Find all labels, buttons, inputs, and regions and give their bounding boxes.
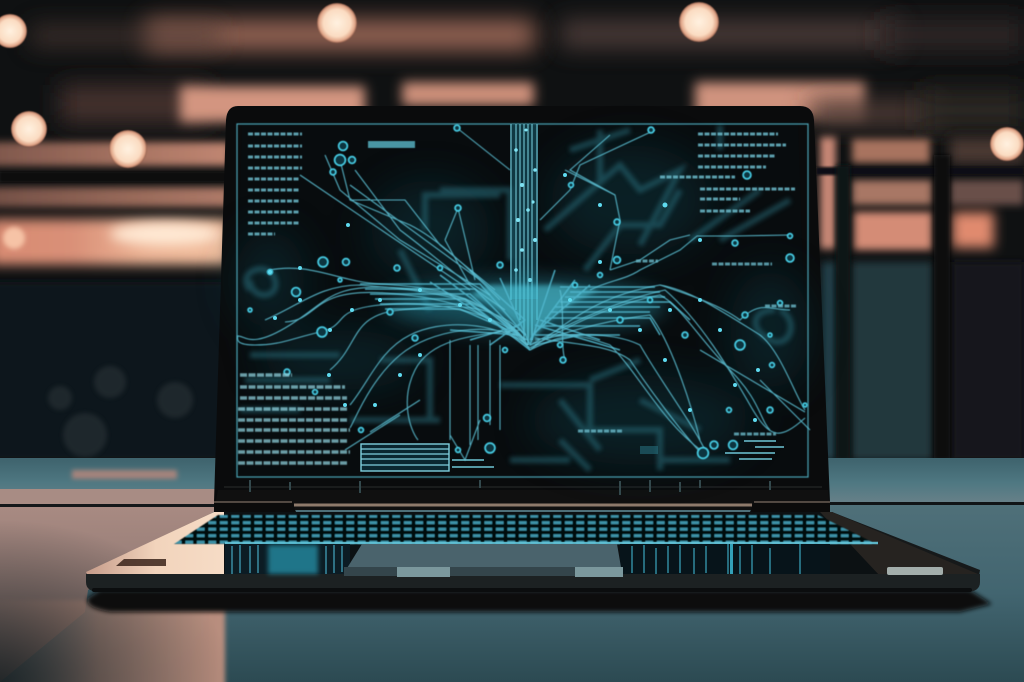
background: blurred room bbox=[0, 0, 1024, 470]
screen text block: bottom left bbox=[238, 375, 350, 463]
faded bokeh lights bbox=[48, 366, 193, 457]
background glowing strip: left bbox=[0, 219, 230, 265]
screen: haze bbox=[235, 145, 810, 465]
network fan glow bbox=[385, 279, 665, 331]
network branches: right bbox=[457, 128, 810, 452]
screen text block: top label bbox=[368, 141, 415, 148]
screen text block: top left bbox=[248, 134, 302, 234]
background band: middle bbox=[60, 85, 210, 123]
central trunk bbox=[510, 124, 538, 345]
trackpad bbox=[344, 544, 622, 573]
laptop shadow bbox=[87, 590, 992, 612]
keyboard bbox=[174, 515, 876, 544]
screen: lower bezel reflections bbox=[250, 480, 770, 495]
screen text block: top right bbox=[660, 134, 795, 211]
background strips: right bbox=[852, 139, 930, 163]
table bbox=[0, 460, 1024, 682]
laptop base bbox=[86, 512, 980, 592]
background band: top bbox=[145, 20, 535, 50]
small bright nodes bbox=[268, 173, 760, 422]
lamps bbox=[0, 2, 1024, 168]
network trunks: horizontal bundles bbox=[360, 270, 690, 350]
screen lines: bottom bbox=[452, 441, 784, 467]
screen chart box bbox=[361, 444, 449, 471]
network nodes bbox=[248, 125, 807, 458]
screen text labels: right bbox=[578, 261, 797, 434]
screen: faint circuit background bbox=[240, 125, 791, 470]
laptop lid bbox=[214, 106, 830, 512]
indicator right bbox=[887, 567, 943, 575]
screen bbox=[233, 122, 810, 495]
background dark panel: lower left bbox=[0, 282, 226, 460]
screen reflection right bbox=[620, 544, 830, 574]
background dark panels: lower right bbox=[852, 262, 932, 460]
railing bbox=[0, 172, 226, 182]
background band: lower left bbox=[0, 142, 230, 166]
network branches: left bbox=[237, 155, 530, 460]
hinge bbox=[214, 502, 830, 512]
indicator left bbox=[116, 559, 166, 566]
table reflection: pink left bbox=[0, 507, 222, 682]
keyboard front edge glow bbox=[225, 542, 878, 544]
screen reflection left bbox=[225, 544, 350, 574]
